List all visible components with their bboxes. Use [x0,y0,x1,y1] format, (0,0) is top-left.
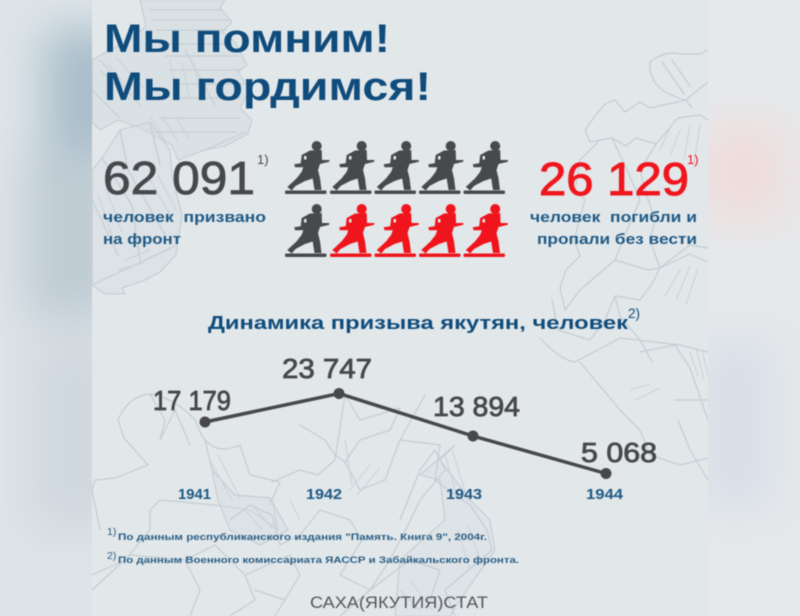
footnotes [107,526,519,566]
icon row: soldiers top [285,141,508,194]
flower sketch: right [540,50,708,480]
year axis labels: 1944 [586,487,623,503]
title: Мы гордимся! [104,65,431,109]
line chart [153,353,657,503]
stat: killed and missing: 26 129 [539,153,689,205]
data labels: 13 894 [433,391,520,422]
chart heading [208,306,640,333]
data labels: 5 068 [581,437,657,468]
footnotes: 1) [107,526,116,538]
stat: killed and missing: человек погибли и [530,210,697,226]
stat: called up: человек призвано [103,210,266,226]
title [104,17,431,109]
flower sketch: top left [92,0,252,294]
stat: killed and missing [530,152,699,248]
background: flower sketches [92,0,708,616]
stat: called up [103,152,269,248]
year axis labels: 1943 [446,487,482,503]
footnotes: По данным республиканского издания "Память. Книга 9", 2004г. [118,532,487,543]
data labels [153,353,657,468]
stat: killed and missing: 1) [687,152,699,167]
year axis labels: 1941 [178,487,211,503]
chart heading: 2) [628,306,640,321]
background: main panel [92,0,708,616]
year axis labels: 1942 [306,487,342,503]
flower sketch: bottom left and centre [92,394,495,616]
chart heading: Динамика призыва якутян, человек [208,312,629,333]
source logo text: САХА(ЯКУТИЯ)СТАТ [310,593,488,612]
stat: called up: 1) [257,152,269,167]
icon row: soldiers bottom [285,204,508,257]
data labels: 17 179 [153,385,231,416]
title: Мы помним! [104,17,390,61]
background: left side blurred strip [1,0,92,544]
year axis labels [178,487,623,503]
stat: called up: на фронт [103,232,181,248]
background: right side blurred strip [708,124,788,480]
footnotes: 2) [107,550,116,562]
stat: killed and missing: пропали без вести [537,232,697,248]
footnotes: По данным Военного комиссариата ЯАССР и Забайкальского фронта. [118,555,519,566]
data labels: 23 747 [282,353,372,384]
stat: called up: 62 091 [103,152,255,204]
